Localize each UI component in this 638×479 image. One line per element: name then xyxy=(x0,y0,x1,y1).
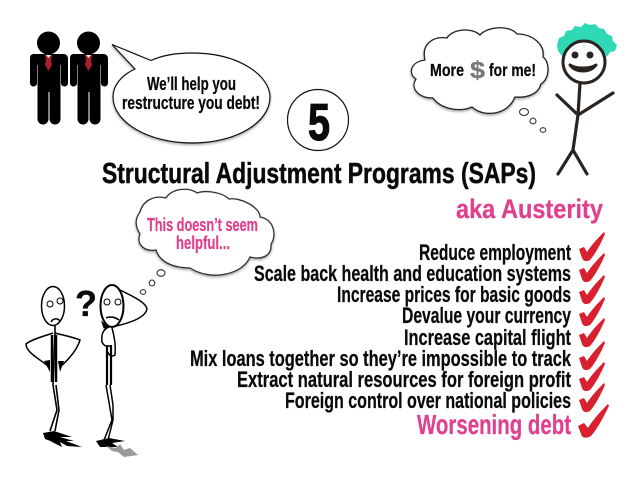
speech text line 1: We’ll help you xyxy=(147,74,236,94)
icon: happy stick figure with teal hair xyxy=(557,23,617,174)
icon: two confused stick figures xyxy=(26,283,147,457)
number badge 5 xyxy=(288,90,348,152)
dollar sign: $ xyxy=(470,57,486,84)
icon: two men in suits xyxy=(30,32,108,124)
cloud text line 1: This doesn’t seem xyxy=(147,215,258,235)
cloud text: More xyxy=(430,60,464,80)
title: Structural Adjustment Programs (SAPs) xyxy=(102,158,536,190)
number badge 5: 5 xyxy=(308,94,330,152)
right figure xyxy=(96,285,147,457)
speech text line 2: restructure you debt! xyxy=(122,93,260,113)
thought cloud: not helpful xyxy=(136,189,274,294)
question mark: ? xyxy=(75,283,97,324)
subtitle: aka Austerity: aka Austerity xyxy=(456,194,603,224)
cloud text line 2: helpful... xyxy=(176,233,230,253)
thought bubbles xyxy=(520,108,546,132)
checklist xyxy=(190,240,572,440)
thought cloud: more money xyxy=(411,28,548,132)
thought cloud: more money: for me! xyxy=(489,60,536,80)
red check marks xyxy=(578,232,609,438)
list item: Reduce employment xyxy=(419,240,571,265)
speech bubble: restructure xyxy=(112,44,270,143)
list item: Increase capital flight xyxy=(404,325,571,350)
thought bubbles xyxy=(140,270,165,294)
left figure xyxy=(26,286,82,447)
list item: worsening debt: Worsening debt xyxy=(417,409,571,440)
list item: Devalue your currency xyxy=(402,303,572,328)
